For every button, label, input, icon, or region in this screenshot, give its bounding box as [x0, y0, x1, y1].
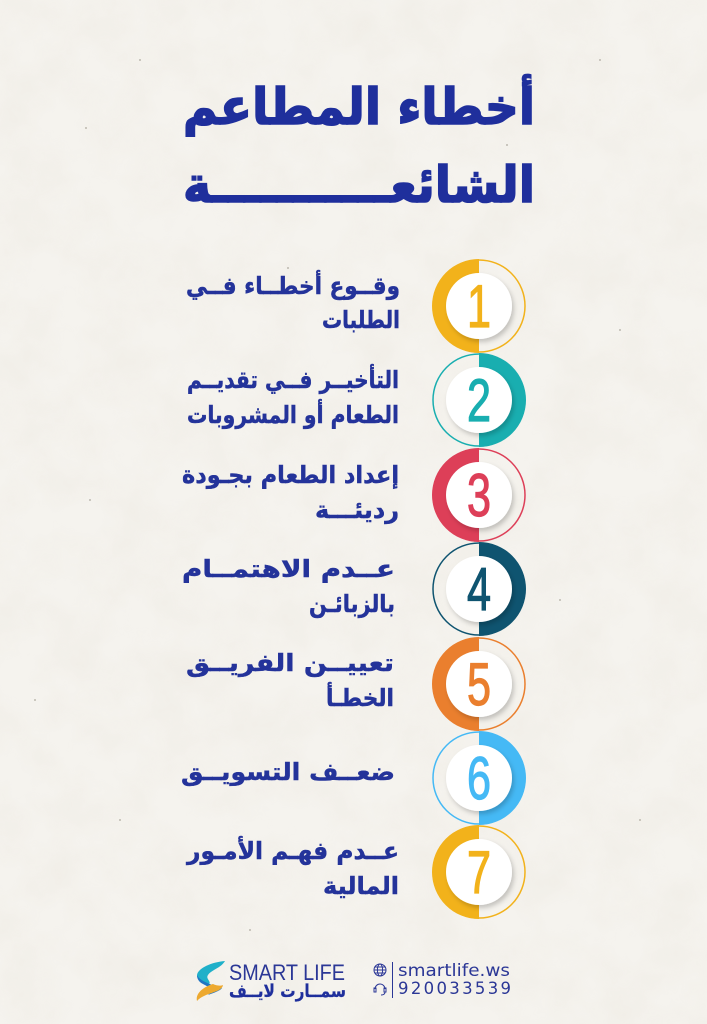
item 1 badge — [432, 259, 525, 353]
icon: S logo — [197, 961, 225, 1001]
item 6 badge: 6 — [467, 746, 491, 813]
item 1 text — [186, 270, 400, 334]
website: smartlife.ws — [398, 961, 510, 980]
brand name: سمــارت لايــف — [229, 981, 346, 1002]
item 6 badge — [433, 731, 526, 825]
item 3 text — [182, 461, 399, 524]
item 7 badge: 7 — [467, 840, 491, 907]
item 4 badge: 4 — [467, 557, 491, 624]
item 6 — [181, 731, 526, 825]
title: الشائعـــــــــــة — [183, 156, 535, 214]
item 5 badge: 5 — [467, 652, 491, 719]
item 1 text: وقــوع أخطــاء فــي — [186, 270, 400, 300]
item 4 badge — [433, 542, 526, 636]
item 7 text — [186, 836, 399, 900]
footer logo — [197, 960, 346, 1002]
item 5 text — [186, 649, 394, 712]
item 5 — [186, 637, 525, 731]
title — [183, 74, 535, 214]
phone: 920033539 — [398, 979, 511, 998]
item 2 text: التأخيــر فــي تقديــم — [187, 364, 399, 394]
item 3 badge — [432, 448, 525, 542]
item 3 text: رديئـــة — [315, 496, 399, 524]
item 2 text: الطعام أو المشروبات — [187, 399, 399, 429]
item 5 text: الخطـأ — [326, 682, 394, 712]
item 3 text: إعداد الطعام بجـودة — [182, 461, 399, 489]
brand name: SMART LIFE — [229, 960, 345, 985]
item 1 — [186, 259, 525, 353]
item 2 badge: 2 — [467, 368, 491, 435]
item 4 text — [182, 555, 395, 618]
item 4 text: بالزبائـن — [309, 590, 395, 618]
title: أخطاء المطاعم — [183, 74, 535, 136]
footer contacts — [374, 961, 511, 998]
item 4 text: عــدم الاهتمــام — [182, 555, 395, 583]
divider — [392, 962, 393, 998]
item 1 badge: 1 — [467, 274, 491, 341]
item 1 text: الطلبات — [322, 306, 400, 334]
item 7 badge — [432, 825, 525, 919]
item 3 badge: 3 — [467, 463, 491, 530]
item 7 text: المالية — [323, 872, 399, 900]
icon: globe — [374, 964, 386, 976]
item 7 — [186, 825, 525, 919]
item 2 text — [187, 364, 399, 429]
item 2 badge — [433, 353, 526, 447]
item 2 — [187, 353, 526, 447]
item 7 text: عــدم فهـم الأمـور — [186, 836, 399, 865]
item 5 badge — [432, 637, 525, 731]
item 3 — [182, 448, 525, 542]
item 6 text: ضعــف التسويــق — [181, 758, 395, 786]
icon: headset — [374, 984, 386, 995]
item 4 — [182, 542, 526, 636]
brand name — [229, 960, 346, 1002]
item 5 text: تعييــن الفريــق — [186, 649, 394, 677]
